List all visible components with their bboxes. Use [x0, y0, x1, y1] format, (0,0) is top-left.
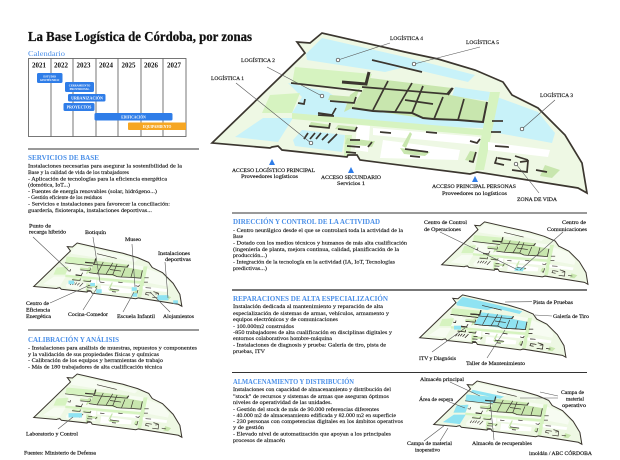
labels: direccion map: Centro de Control — [424, 220, 468, 226]
bar: estudio geotecnico — [37, 73, 62, 83]
access: principal personas: Proveedores no logísticos — [442, 191, 507, 197]
labels: almacenamiento map: operativo — [562, 403, 586, 409]
heading: calendario: Calendario — [28, 49, 65, 58]
label: logistica 1: LOGÍSTICA 1 — [211, 74, 244, 82]
map perimeter — [212, 33, 587, 193]
panel: main site map — [211, 33, 587, 203]
mini map: almacenamiento — [434, 381, 582, 444]
labels: almacenamiento map: Almacén principal — [420, 377, 465, 383]
text: calibracion: - Instalaciones para análisis de muestras, repuestos y componentes — [28, 346, 197, 352]
calendar years: 2026 — [144, 62, 158, 70]
labels: servicios map: Instalaciones — [158, 251, 190, 257]
panel: almacenamiento — [232, 372, 587, 454]
access: logistico principal: Proveedores logísticos — [241, 174, 298, 180]
labels: almacenamiento map: inoperativo — [415, 448, 440, 454]
calendar years: 2027 — [167, 62, 182, 70]
text: almacenamiento: - 230 personas con competencias digitales en los ámbitos operativos — [233, 419, 403, 425]
labels: servicios map: Museo — [125, 237, 141, 243]
text: almacenamiento: "stock" de recursos y sistemas de armas que aseguran óptimos — [233, 394, 389, 400]
label: logistica 2: LOGÍSTICA 2 — [241, 56, 275, 64]
access: secundario: Servicios 1 — [337, 181, 365, 187]
text: almacenamiento: - 40.000 m2 de almacenamiento edificada y 82.000 m2 en superficie — [233, 412, 397, 419]
source: Fuentes: Ministerio de Defensa — [24, 450, 97, 456]
heading: almacenamiento: ALMACENAMIENTO Y DISTRIBUCIÓN — [233, 376, 354, 386]
text: servicios: Base y la calidad de vida de los trabajadores — [28, 170, 129, 176]
panel: servicios de base — [26, 148, 199, 320]
calendar years — [32, 62, 182, 70]
text: reparaciones: - Instalaciones de diagnosis y prueba: Galería de tiro, pista de — [233, 342, 387, 348]
text: reparaciones: equipos electrónicos y de comunicaciones — [233, 317, 338, 323]
text: direccion: - Dotado con los medios técnicos y humanos de más alta cualificación — [233, 240, 407, 246]
labels: almacenamiento map: material — [566, 396, 584, 402]
text: reparaciones: entornos colaborativos hombre-máquina — [233, 336, 333, 342]
text: direccion: predictivas...) — [233, 265, 267, 272]
heading: reparaciones: REPARACIONES DE ALTA ESPECIALIZACIÓN — [233, 293, 388, 303]
text: reparaciones: - 100.000m2 construidos — [233, 324, 294, 330]
labels: servicios map: Botiquín — [85, 230, 106, 236]
text: servicios: Instalaciones necesarias para asegurar la sostenibilidad de la — [28, 164, 183, 170]
access: principal personas — [432, 176, 516, 197]
text: servicios: - Aplicación de tecnologías para la eficiencia energética — [28, 175, 168, 182]
bar: edificacion: EDIFICACIÓN — [121, 114, 146, 120]
text: direccion: - Centro neurálgico desde el que se controlará toda la actividad de la — [233, 228, 404, 234]
calendar years: 2022 — [54, 62, 68, 70]
calendar years: 2024 — [99, 62, 114, 70]
labels: reparaciones map: ITV y Diagnósis — [419, 356, 456, 362]
calendar years: 2025 — [122, 62, 136, 70]
labels: servicios map: Alojamientos — [163, 314, 194, 320]
labels: servicios map: Centro de — [26, 301, 50, 307]
text: direccion: Base — [233, 234, 243, 240]
labels: servicios map: recarga híbrido — [29, 230, 66, 236]
labels: servicios map — [26, 224, 194, 320]
labels: servicios map: Energética — [26, 314, 52, 320]
labels: almacenamiento map: Campa de material — [407, 441, 453, 447]
labels: almacenamiento map: Almacén de recuperables — [472, 441, 532, 447]
mini map: direccion — [442, 222, 588, 284]
labels: direccion map — [424, 220, 587, 233]
access: logistico principal — [232, 159, 315, 180]
access: principal personas: ACCESO PRINCIPAL PERSONAS — [432, 184, 516, 190]
bar: equipamiento: EQUIPAMIENTO — [143, 125, 172, 129]
text: almacenamiento: procesos de almacén — [233, 438, 285, 444]
mini map: calibracion — [34, 374, 182, 437]
text: calibracion: y la validación de sus propiedades físicas y químicas — [28, 351, 159, 358]
map green areas and roads — [262, 67, 560, 178]
text: reparaciones: -850 trabajadores de alta cualificación en disciplinas digitales y — [233, 329, 392, 336]
label: logistica 4: LOGÍSTICA 4 — [390, 34, 423, 42]
map base — [212, 33, 587, 193]
text: servicios: (domótica, IoT...) — [28, 182, 70, 189]
labels: direccion map: Centro de — [562, 220, 587, 226]
labels: almacenamiento map: Campa de — [561, 390, 585, 396]
text: calibracion: - Calibración de los equipos y herramientas de trabajo — [28, 358, 163, 364]
calendar grid — [28, 58, 186, 136]
labels: almacenamiento map — [407, 377, 586, 454]
leader lines: reparaciones — [432, 302, 552, 358]
map blue zones — [235, 38, 555, 152]
text: calibracion — [28, 346, 197, 370]
text: almacenamiento — [233, 387, 403, 444]
bar: urbanizacion: URBANIZACIÓN — [71, 95, 103, 100]
leader line: laboratorio — [58, 417, 73, 429]
text: servicios: - Gestión eficiente de los residuos — [28, 194, 102, 201]
text: servicios: - Servicios e instalaciones para favorecer la conciliación: — [28, 200, 170, 208]
heading: direccion: DIRECCIÓN Y CONTROL DE LA ACTIVIDAD — [233, 216, 380, 226]
labels: reparaciones map: Galería de Tiro — [553, 314, 589, 320]
bar: cerramiento provisional — [65, 82, 94, 92]
label: laboratorio y control: Laboratorio y Control — [26, 432, 79, 438]
panel: calibracion y analisis — [26, 330, 199, 438]
bar: proyectos — [64, 103, 94, 111]
bar: urbanizacion — [68, 94, 106, 102]
title: La Base Logística de Córdoba, por zonas — [28, 29, 252, 44]
calendar years: 2023 — [76, 62, 91, 70]
labels: servicios map: Punto de — [29, 224, 52, 230]
label: logistica 3: LOGÍSTICA 3 — [540, 91, 573, 99]
text: reparaciones: Instalación dedicada al mantenimiento y reparación de alta — [233, 304, 384, 310]
access: secundario: ACCESO SECUNDARIO — [321, 175, 381, 181]
panel: reparaciones — [232, 289, 589, 367]
calendar years: 2021 — [32, 62, 46, 70]
text: almacenamiento: Instalaciones con capacidad de almacenamiento y distribución del — [233, 387, 391, 393]
labels: servicios map: Escuela Infantil — [117, 313, 156, 320]
access: secundario — [321, 167, 381, 187]
text: almacenamiento: niveles de operatividad de las unidades. — [233, 400, 333, 406]
text: direccion: (ingeniería de planta, mejora continua, calidad, planificación de la — [233, 246, 400, 253]
labels: servicios map: Cocina-Comedor — [68, 312, 108, 318]
label: logistica 5: LOGÍSTICA 5 — [466, 38, 499, 46]
label: zona de vida: ZONA DE VIDA — [517, 197, 557, 203]
labels: almacenamiento map: Área de espera — [419, 395, 454, 403]
leader lines: direccion — [440, 232, 563, 270]
text: reparaciones — [233, 304, 392, 355]
text: almacenamiento: - Gestión del stock de más de 90.000 referencias diferentes — [233, 406, 379, 413]
text: reparaciones: especialización de sistemas de armas, vehículos, armamento y — [233, 311, 389, 317]
labels: direccion map: Comunicaciones — [547, 227, 587, 233]
text: almacenamiento: - Elevado nivel de automatización que apoyan a los principales — [233, 432, 391, 438]
panel: calendario — [28, 49, 186, 136]
mini map: servicios — [34, 243, 182, 306]
bar: estudio geotecnico: GEOTÉCNICO — [40, 79, 60, 82]
credit: imoldán / ABC CÓRDOBA — [529, 449, 592, 457]
text: direccion: producción...) — [233, 252, 267, 259]
labels: reparaciones map: Taller de Mantenimiento — [466, 361, 525, 367]
bar: cerramiento provisional: CERRAMIENTO — [69, 84, 91, 87]
bar: cerramiento provisional: PROVISIONAL — [70, 88, 89, 91]
labels: direccion map: de Operaciones — [424, 227, 461, 233]
leader lines: almacenamiento — [424, 382, 558, 441]
text: direccion: - Integración de la tecnología en la actividad (IA, IoT, Tecnologías — [233, 259, 395, 266]
mini map: reparaciones — [420, 295, 566, 357]
labels: servicios map: deportivas — [165, 257, 191, 263]
bar: edificacion — [94, 113, 172, 120]
labels: servicios map: Eficiencia — [26, 306, 51, 314]
bar: proyectos: PROYECTOS — [67, 105, 92, 110]
text: servicios: guardería, fisioterapia, instalaciones deportivas... — [28, 207, 153, 214]
text: almacenamiento: y de gestión — [233, 425, 264, 431]
panel: direccion y control — [232, 212, 588, 284]
heading: calibracion: CALIBRACIÓN Y ANÁLISIS — [28, 334, 119, 344]
access: logistico principal: ACCESO LOGÍSTICO PRINCIPAL — [232, 166, 315, 174]
text: calibracion: - Más de 180 trabajadores de alta cualificación técnica — [28, 363, 163, 370]
labels: reparaciones map — [419, 300, 589, 367]
leader lines: servicios — [33, 237, 170, 312]
labels: reparaciones map: Pista de Pruebas — [533, 300, 573, 306]
bar: equipamiento — [128, 122, 186, 130]
text: direccion — [233, 228, 407, 272]
bar: estudio geotecnico: ESTUDIO — [43, 75, 57, 78]
text: servicios — [28, 164, 183, 214]
leader lines with markers — [236, 43, 555, 193]
map buildings — [291, 60, 547, 172]
text: servicios: - Fuentes de energía renovables (solar, hidrógeno...) — [28, 188, 157, 195]
heading: servicios de base: SERVICIOS DE BASE — [28, 153, 99, 162]
text: reparaciones: pruebas, ITV — [233, 349, 265, 355]
